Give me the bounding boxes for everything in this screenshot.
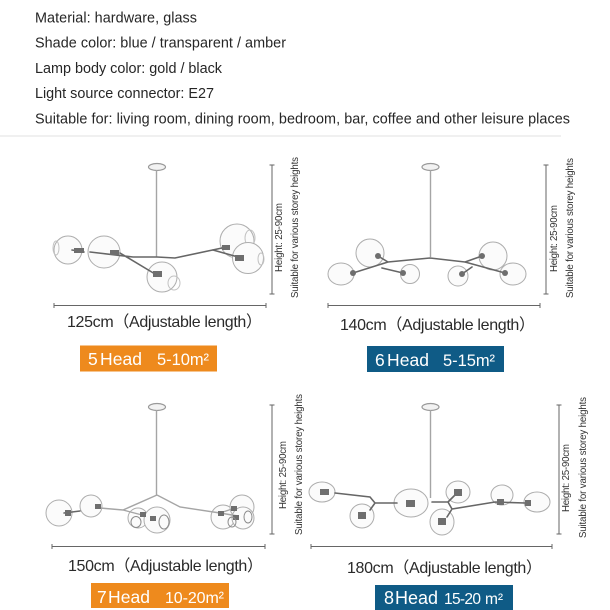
badge: 5 head: 5 bbox=[88, 349, 98, 369]
storey height note: Suitable for various storey heights bbox=[578, 397, 589, 538]
badge: 7 head: 7 bbox=[97, 587, 107, 607]
height label: Height: 25-90cm bbox=[274, 203, 285, 272]
badge: 8 head: 8 bbox=[384, 588, 394, 608]
lamp illustration: 7 head bbox=[46, 404, 254, 533]
badge: 7 head: 10-20m² bbox=[165, 590, 225, 607]
panel: 8 head lamp bbox=[309, 397, 589, 610]
specification list: Light source connector: E27 bbox=[35, 86, 214, 102]
length dimension bbox=[311, 544, 552, 549]
specification list: Shade color: blue / transparent / amber bbox=[35, 36, 286, 52]
panel: 5 head lamp bbox=[53, 157, 301, 372]
length label: 180cm（Adjustable length） bbox=[347, 559, 542, 577]
lamp illustration: 8 head bbox=[309, 404, 550, 535]
specification list bbox=[35, 10, 570, 128]
length dimension bbox=[54, 303, 266, 308]
badge: 8 head: Head bbox=[395, 588, 438, 608]
specification list: Lamp body color: gold / black bbox=[35, 61, 223, 77]
badge: 8 head: m² bbox=[485, 591, 503, 608]
storey height note: Suitable for various storey heights bbox=[565, 158, 576, 298]
badge: 7 head: Head bbox=[108, 587, 150, 607]
panel: 7 head lamp bbox=[46, 394, 305, 608]
badge: 5 head: 5-10m² bbox=[157, 351, 210, 369]
lamp illustration: 5 head bbox=[53, 164, 264, 292]
badge: 6 head: 5-15m² bbox=[443, 352, 496, 370]
badge: 7 head bbox=[91, 583, 229, 608]
height label: Height: 25-90cm bbox=[549, 205, 560, 272]
badge: 6 head: 6 bbox=[375, 350, 385, 370]
specification list: Suitable for: living room, dining room, bedroom, bar, coffee and other leisure places bbox=[35, 112, 570, 128]
length dimension bbox=[52, 544, 265, 549]
height dimension bbox=[544, 165, 548, 294]
length label: 140cm（Adjustable length） bbox=[340, 316, 535, 334]
lamp illustration: 6 head bbox=[328, 164, 526, 286]
badge: 5 head: Head bbox=[100, 349, 142, 369]
length label: 125cm（Adjustable length） bbox=[67, 313, 262, 331]
storey height note: Suitable for various storey heights bbox=[290, 157, 301, 298]
height label: Height: 25-90cm bbox=[278, 441, 289, 509]
height label: Height: 25-90cm bbox=[561, 444, 572, 512]
height dimension bbox=[556, 405, 562, 534]
panel: 6 head lamp bbox=[328, 158, 576, 372]
length label: 150cm（Adjustable length） bbox=[68, 557, 263, 575]
length dimension bbox=[328, 303, 540, 308]
storey height note: Suitable for various storey heights bbox=[294, 394, 305, 535]
badge: 5 head bbox=[80, 346, 217, 372]
badge: 8 head bbox=[375, 585, 513, 610]
specification list: Material: hardware, glass bbox=[35, 10, 197, 26]
height dimension bbox=[270, 405, 274, 534]
badge: 8 head: 15-20 bbox=[444, 591, 481, 608]
badge: 6 head bbox=[367, 346, 504, 372]
badge: 6 head: Head bbox=[387, 350, 429, 370]
height dimension bbox=[270, 165, 274, 294]
